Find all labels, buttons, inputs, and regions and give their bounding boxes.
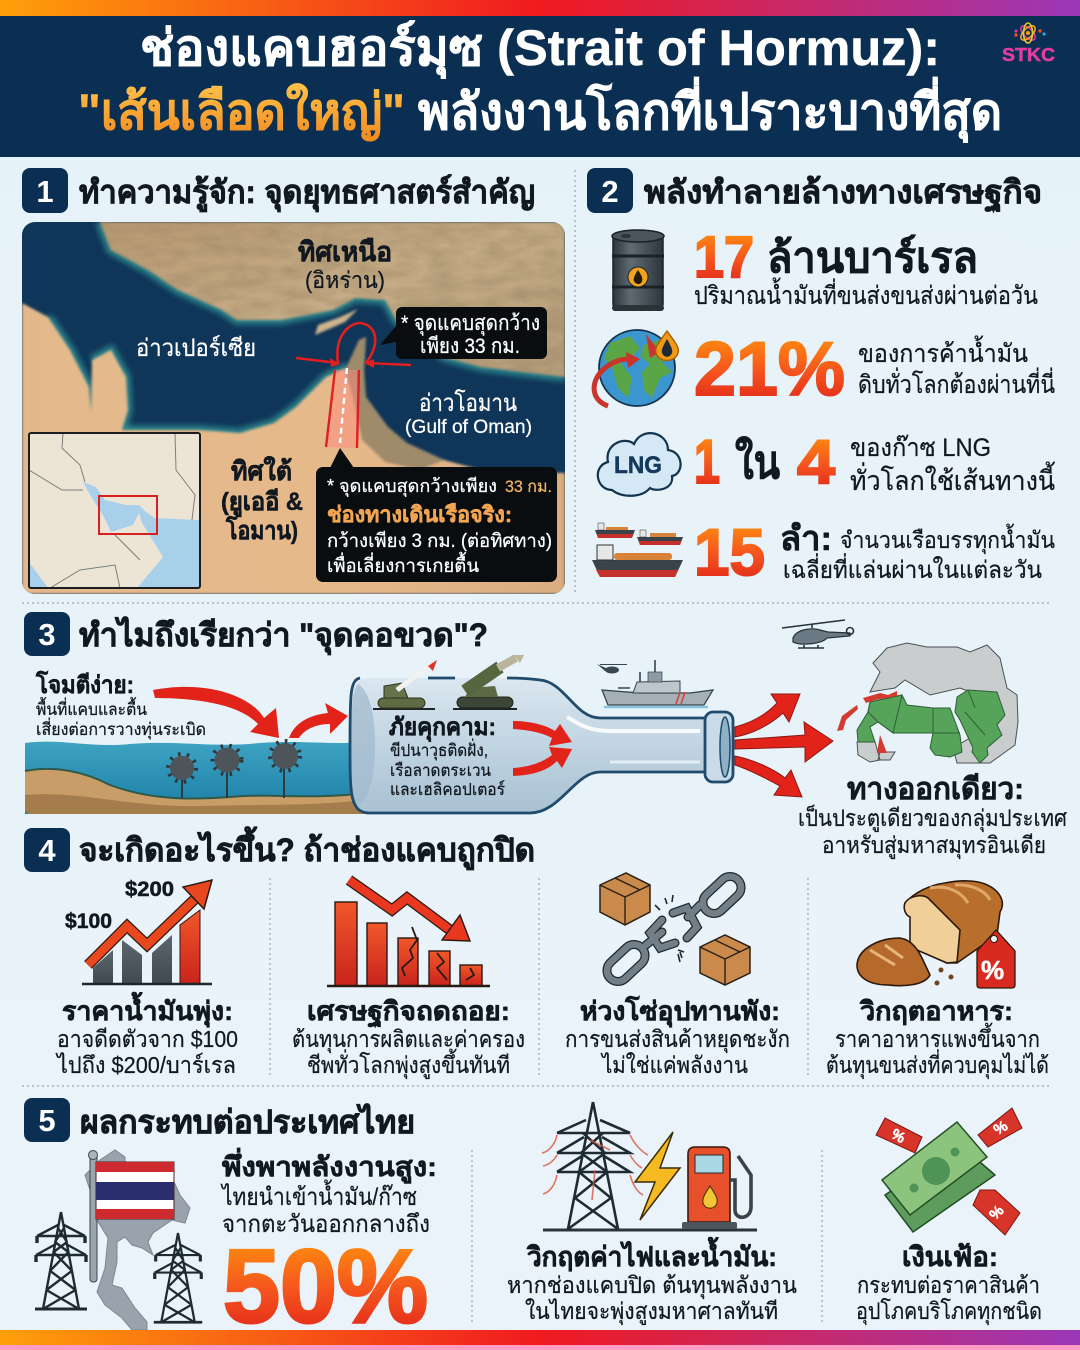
stat: 21 percent: 21% <box>694 327 845 412</box>
section 4: if the strait closes <box>24 826 1049 1079</box>
section 3: chokepoint <box>24 612 1067 859</box>
text: food crisis <box>826 996 1049 1079</box>
stat: 21 percent <box>694 327 1055 412</box>
text: food crisis: ต้นทุนขนส่งที่ควบคุมไม่ได้ <box>826 1049 1049 1079</box>
label: north <box>298 237 392 293</box>
heading 4: จะเกิดอะไรขึ้น? ถ้าช่องแคบถูกปิด <box>79 826 535 871</box>
badge 2: 2 <box>601 174 619 209</box>
text: threat: ภัยคุกคาม: <box>389 714 496 743</box>
icon: money and price tags: % <box>986 1202 1008 1224</box>
icon: right pylon <box>154 1233 202 1322</box>
panel: food crisis <box>826 881 1049 1079</box>
stat: 17 million barrels <box>694 225 1038 310</box>
text: threat: ขีปนาวุธติดฝั่ง, <box>390 738 488 761</box>
stat: 17 million barrels: 17 <box>694 225 754 290</box>
inset locator map <box>29 433 200 588</box>
chart icon: falling bars <box>327 880 490 986</box>
panel: recession <box>292 880 525 1079</box>
icon: oil barrel <box>612 230 664 311</box>
badge 3 <box>24 612 70 656</box>
panel: supply chain <box>565 872 790 1078</box>
stat: 15 ships: ลำ: <box>780 520 832 558</box>
stat: 21 percent: ของการค้าน้ำมัน <box>858 335 1028 368</box>
text: oil price <box>55 991 238 1078</box>
callout: shipping lane <box>316 448 557 582</box>
icon: LNG cloud <box>598 433 681 496</box>
strait route markings <box>296 323 411 448</box>
text: supply chain: ห่วงโซ่อุปทานพัง: <box>580 995 780 1028</box>
callout: shipping lane: * จุดแคบสุดกว้างเพียง <box>327 476 497 497</box>
text: power and fuel crisis: ในไทยจะพุ่งสูงมหาศาลทันที <box>525 1298 778 1325</box>
callout: narrowest width: * จุดแคบสุดกว้าง <box>401 312 540 336</box>
text: recession: เศรษฐกิจถดถอย: <box>307 996 510 1029</box>
text: threat <box>389 714 505 799</box>
label: south: ทิศใต้ <box>231 456 292 486</box>
stat: 15 ships <box>694 515 1055 589</box>
text: supply chain <box>565 995 790 1078</box>
stat: 50 percent: 50% <box>223 1229 428 1345</box>
text: threat: และเฮลิคอปเตอร์ <box>390 780 505 799</box>
mine 2 <box>213 746 241 774</box>
map: Arab region <box>837 643 1018 763</box>
chart icon: rising price: $200 <box>125 878 174 901</box>
label: Persian Gulf: อ่าวเปอร์เซีย <box>136 334 256 362</box>
badge 1: 1 <box>36 174 54 209</box>
section 1: strategic point <box>22 168 565 594</box>
label: north: (อิหร่าน) <box>305 267 385 293</box>
icon: helicopter <box>782 620 854 648</box>
text: easy to attack <box>35 670 206 740</box>
text: inflation: เงินเฟ้อ: <box>902 1242 998 1272</box>
text: food crisis: ราคาอาหารแพงขึ้นจาก <box>835 1023 1040 1052</box>
badge 4: 4 <box>38 833 56 868</box>
title line 2: พลังงานโลกที่เปราะบางที่สุด <box>418 77 1002 143</box>
stat: 15 ships: เฉลี่ยที่แล่นผ่านในแต่ละวัน <box>783 553 1042 584</box>
text: energy dependence: จากตะวันออกกลางถึง <box>222 1211 430 1238</box>
text: food crisis: วิกฤตอาหาร: <box>860 996 1013 1026</box>
stat: 15 ships: จำนวนเรือบรรทุกน้ำมัน <box>840 524 1055 554</box>
arrow to mine <box>153 687 279 738</box>
text: energy dependence: ไทยนำเข้าน้ำมัน/ก๊าซ <box>220 1179 417 1211</box>
text: inflation <box>856 1242 1042 1325</box>
panel: power and fuel crisis <box>507 1102 797 1325</box>
callout: narrowest width <box>380 307 547 359</box>
icon: money and price tags: % <box>888 1126 908 1147</box>
text: energy dependence: พึ่งพาพลังงานสูง: <box>222 1147 437 1184</box>
label: south: (ยูเออี & <box>221 488 303 518</box>
icon: warship <box>602 660 713 707</box>
label: Gulf of Oman <box>405 389 532 438</box>
mine 3 <box>270 742 300 770</box>
text: inflation: อุปโภคบริโภคทุกชนิด <box>856 1298 1042 1325</box>
stat: 1 in 4: 4 <box>797 428 836 497</box>
icon: LNG cloud: LNG <box>614 452 662 479</box>
text: inflation: กระทบต่อราคาสินค้า <box>857 1272 1040 1298</box>
section 5: impact on Thailand <box>24 1098 1042 1345</box>
icon: tanker ships <box>592 523 683 577</box>
bottle strait <box>350 678 733 813</box>
stat: 17 million barrels: ล้านบาร์เรล <box>767 234 978 281</box>
heading 2: พลังทำลายล้างทางเศรษฐกิจ <box>644 174 1042 213</box>
chart icon: rising price: $100 <box>65 910 112 933</box>
title line 1: ช่องแคบฮอร์มุซ (Strait of Hormuz): <box>140 20 940 79</box>
callout: narrowest width: เพียง 33 กม. <box>420 335 520 358</box>
text: recession <box>292 996 525 1079</box>
badge 5 <box>24 1098 70 1142</box>
label: Gulf of Oman: (Gulf of Oman) <box>405 417 532 438</box>
label: north: ทิศเหนือ <box>298 237 392 267</box>
text: recession: ต้นทุนการผลิตและค่าครอง <box>292 1026 525 1053</box>
callout: shipping lane: กว้างเพียง 3 กม. (ต่อทิศทาง) <box>327 530 552 552</box>
satellite map <box>22 222 565 594</box>
text: power and fuel crisis: วิกฤตค่าไฟและน้ำมัน: <box>526 1236 777 1272</box>
header banner <box>0 16 1080 157</box>
text: supply chain: การขนส่งสินค้าหยุดชะงัก <box>565 1026 790 1053</box>
icon: small helicopter <box>597 664 627 674</box>
badge 4 <box>24 828 70 872</box>
arrow to bottle <box>289 703 348 738</box>
label: Gulf of Oman: อ่าวโอมาน <box>419 389 517 417</box>
icon: money and price tags: % <box>991 1117 1011 1139</box>
stat: 17 million barrels: ปริมาณน้ำมันที่ขนส่งขนส่งผ่านต่อวัน <box>694 277 1038 310</box>
text: only exit <box>798 773 1067 859</box>
label: south: โอมาน) <box>225 515 298 545</box>
text: only exit: ทางออกเดียว: <box>847 773 1024 806</box>
text: supply chain: ไม่ใช่แค่พลังงาน <box>600 1052 748 1078</box>
badge 3: 3 <box>38 617 56 652</box>
badge 2 <box>587 168 633 213</box>
text: oil price: ราคาน้ำมันพุ่ง: <box>62 991 233 1028</box>
icon: bread and price tag: % <box>981 955 1004 985</box>
icon: money and price tags <box>876 1108 1022 1235</box>
icon: missile launcher <box>373 660 437 709</box>
panel: oil price <box>55 878 238 1078</box>
text: only exit: อาหรับสู่มหาสมุทรอินเดีย <box>822 832 1046 859</box>
heading 3: ทำไมถึงเรียกว่า "จุดคอขวด"? <box>79 616 488 656</box>
logo: STKC <box>1002 23 1055 65</box>
panel: inflation <box>856 1108 1042 1325</box>
callout: shipping lane: เพื่อเลี่ยงการเกยตื้น <box>327 552 479 577</box>
heading 1: ทำความรู้จัก: จุดยุทธศาสตร์สำคัญ <box>79 174 535 213</box>
icon: pylon, lightning, fuel pump <box>542 1102 757 1230</box>
text: threat: เรือลาดตระเวน <box>390 761 491 780</box>
stat: 1 in 4 <box>694 428 1055 497</box>
icon: left pylon <box>35 1212 87 1309</box>
stat: 1 in 4: ทั่วโลกใช้เส้นทางนี้ <box>850 461 1055 496</box>
logo: STKC: STKC <box>1002 45 1055 65</box>
stat: 15 ships: 15 <box>694 515 765 589</box>
heading 5: ผลกระทบต่อประเทศไทย <box>80 1103 415 1140</box>
stat: 1 in 4: ของก๊าซ LNG <box>850 434 991 462</box>
arrows out of bottle <box>735 694 833 797</box>
callout: shipping lane: 33 กม. <box>505 477 552 496</box>
text: easy to attack: เสี่ยงต่อการวางทุ่นระเบิด <box>36 717 206 740</box>
icon: broken chain and boxes <box>600 872 750 986</box>
icon: flag of Thailand <box>88 1150 174 1282</box>
stat: 1 in 4: ใน <box>735 435 780 488</box>
text: power and fuel crisis: หากช่องแคบปิด ต้นทุนพลังงาน <box>507 1272 797 1299</box>
icon: globe with drop <box>594 330 678 406</box>
section 2: economic power <box>587 168 1055 589</box>
map: Thailand <box>85 1150 190 1330</box>
text: oil price: อาจดีดตัวจาก $100 <box>57 1026 238 1052</box>
title line 2 highlighted phrase: "เส้นเลือดใหญ่" <box>78 83 405 141</box>
text: recession: ชีพทั่วโลกพุ่งสูงขึ้นทันที <box>307 1049 510 1079</box>
icon: bread and price tag <box>857 881 1015 988</box>
chart icon: rising price <box>65 878 212 984</box>
text: easy to attack: พื้นที่แคบและตื้น <box>36 697 147 719</box>
callout: shipping lane: ช่องทางเดินเรือจริง: <box>327 502 512 527</box>
stat: 1 in 4: 1 <box>694 428 720 497</box>
text: easy to attack: โจมตีง่าย: <box>35 670 134 699</box>
text: power and fuel crisis <box>507 1236 797 1325</box>
text: energy dependence <box>220 1147 437 1238</box>
text: oil price: ไปถึง $200/บาร์เรล <box>55 1052 236 1078</box>
mine 1 <box>168 754 196 782</box>
badge 5: 5 <box>38 1103 56 1138</box>
badge 1 <box>22 168 68 213</box>
arrows inside bottle <box>513 721 572 776</box>
label: south <box>221 456 303 545</box>
icon: rocket launcher <box>453 655 524 709</box>
seabed with mines <box>25 742 365 814</box>
